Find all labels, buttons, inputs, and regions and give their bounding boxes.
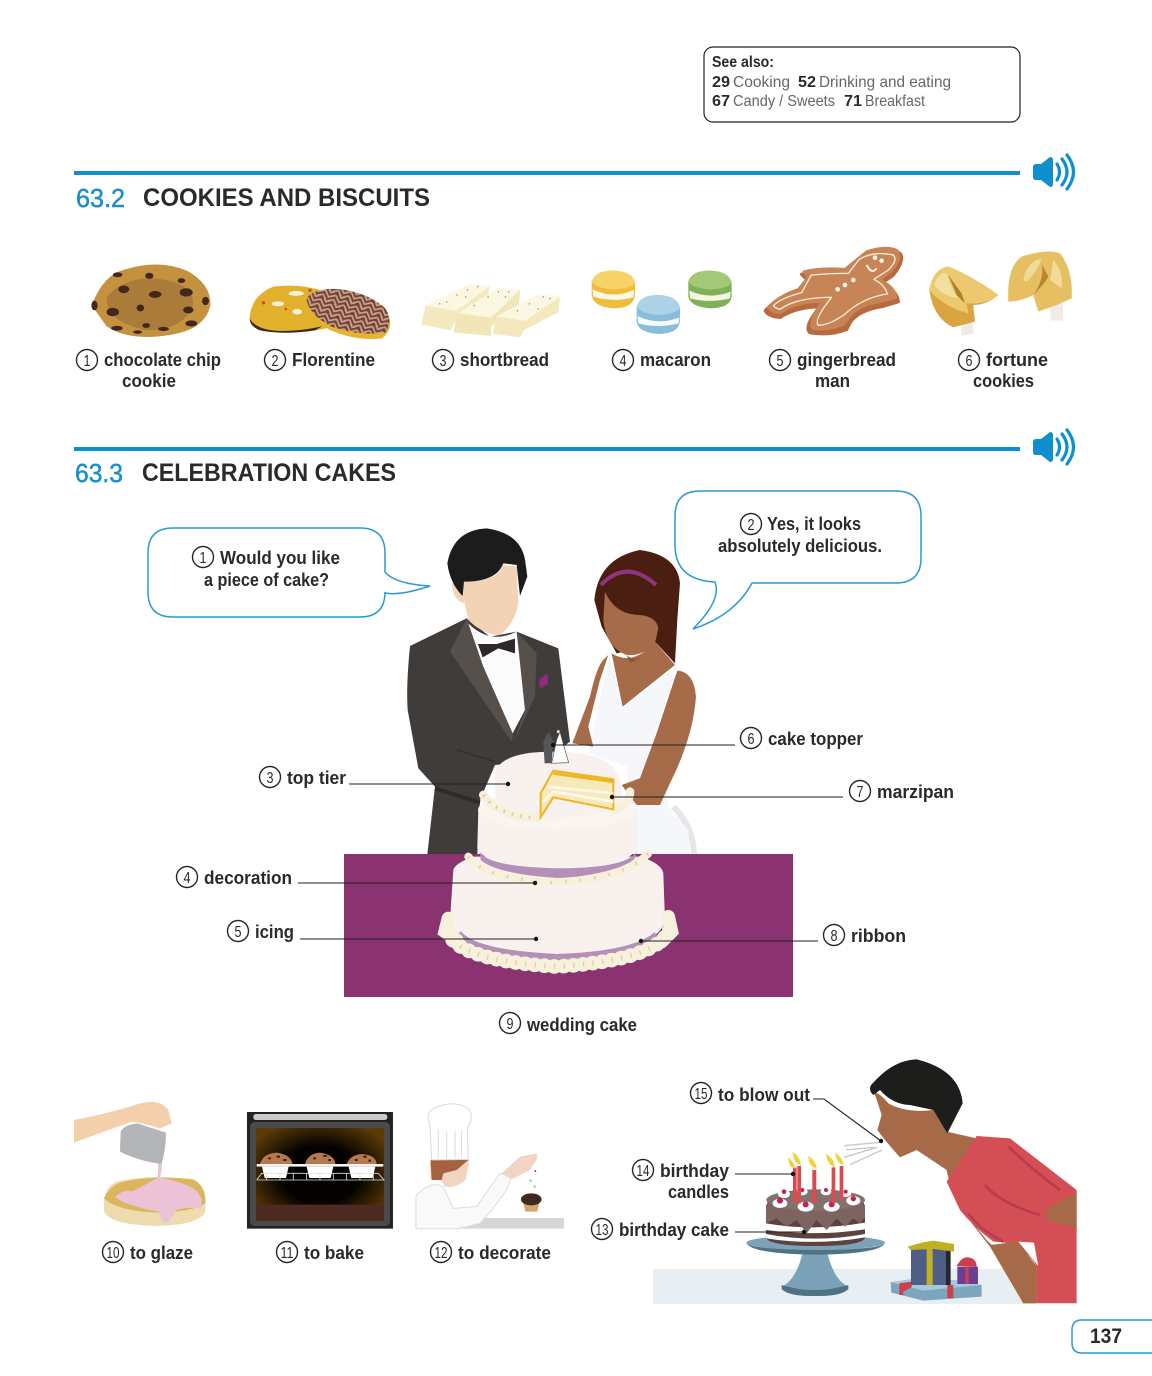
labels: birthday: 14	[636, 1163, 650, 1180]
page number	[1072, 1320, 1152, 1353]
labels: cookies and biscuits: 4	[620, 353, 627, 370]
see also box	[704, 47, 1020, 122]
cake topper	[543, 730, 569, 763]
see also box: 29	[712, 74, 730, 91]
see also box: 71	[844, 93, 862, 110]
illustration: woman blowing out candles	[870, 1059, 1077, 1303]
labels: wedding cake: 5	[234, 924, 242, 941]
labels: cookies and biscuits: macaron	[640, 350, 711, 370]
labels: wedding cake: 8	[830, 928, 838, 945]
section heading 63.3	[74, 447, 1020, 488]
labels: cookies and biscuits: gingerbread	[797, 350, 896, 370]
labels: wedding cake: ribbon	[851, 926, 906, 946]
labels: cookies and biscuits: chocolate chip	[104, 350, 221, 370]
labels: wedding cake	[176, 728, 954, 1035]
labels: verbs: 11	[280, 1245, 294, 1262]
see also box: 67	[712, 93, 730, 110]
illustration: breath lines	[844, 1142, 882, 1165]
labels: cookies and biscuits: man	[815, 371, 850, 391]
labels: cookies and biscuits: shortbread	[460, 350, 549, 370]
illustration: fortune cookies	[929, 251, 1072, 336]
labels: verbs: to bake	[304, 1243, 364, 1263]
speech bubble 1: Would you like	[220, 548, 340, 568]
labels: cookies and biscuits: 1	[84, 353, 91, 370]
illustration: wedding cake	[445, 730, 672, 967]
labels: verbs: to glaze	[130, 1243, 193, 1263]
illustration: Florentine	[250, 286, 390, 339]
labels: cookies and biscuits: 6	[966, 353, 973, 370]
labels: cookies and biscuits: 5	[776, 353, 784, 370]
see also box: Cooking	[733, 74, 790, 91]
speech bubble 1: 1	[200, 550, 207, 567]
illustration: birthday cake on stand	[746, 1152, 885, 1296]
labels: birthday: candles	[668, 1182, 729, 1202]
see also box: See also:	[712, 54, 774, 71]
illustration: groom	[407, 528, 570, 854]
labels: cookies and biscuits: Florentine	[292, 350, 375, 370]
section heading 63.3: 63.3	[75, 458, 123, 488]
page number: 137	[1090, 1325, 1122, 1348]
icon: audio speaker 63.3	[1033, 430, 1074, 464]
illustration: to bake	[247, 1112, 393, 1229]
illustration: to glaze	[74, 1102, 205, 1226]
section heading 63.3: CELEBRATION CAKES	[142, 459, 396, 487]
illustration: bride	[572, 550, 696, 854]
speech bubble 1: a piece of cake?	[204, 570, 329, 590]
labels: wedding cake: 7	[856, 784, 864, 801]
labels: wedding cake: marzipan	[877, 782, 954, 802]
labels: birthday: birthday cake	[619, 1220, 729, 1240]
labels: wedding cake: decoration	[204, 868, 292, 888]
labels: birthday: 13	[596, 1222, 609, 1239]
labels: birthday	[592, 1082, 883, 1240]
labels: cookies and biscuits: 2	[272, 353, 279, 370]
labels: wedding cake: icing	[255, 922, 294, 942]
labels: cookies and biscuits: 3	[440, 353, 447, 370]
see also box: Breakfast	[865, 93, 925, 110]
labels: cookies and biscuits: cookie	[122, 371, 176, 391]
section heading 63.2: COOKIES AND BISCUITS	[143, 184, 430, 212]
labels: wedding cake: top tier	[287, 768, 346, 788]
illustration: table cloth	[344, 854, 793, 997]
section heading 63.2: 63.2	[76, 183, 125, 213]
illustration: chocolate chip cookie	[91, 265, 210, 337]
illustration: to decorate	[416, 1104, 564, 1229]
illustration: shortbread	[421, 284, 560, 337]
see also box: Candy / Sweets	[733, 93, 835, 110]
labels: verbs: 10	[106, 1245, 120, 1262]
slice cut-out	[541, 771, 613, 817]
labels: cookies and biscuits: cookies	[973, 371, 1034, 391]
section heading 63.2	[74, 171, 1020, 213]
labels: cookies and biscuits: fortune	[986, 350, 1048, 370]
see also box: Drinking and eating	[819, 74, 951, 91]
labels: birthday: to blow out	[718, 1085, 810, 1105]
speech bubble 1	[148, 528, 430, 617]
see also box: 52	[798, 74, 816, 91]
labels: wedding cake: 3	[266, 770, 274, 787]
speech bubble 2	[675, 491, 921, 629]
speech bubble 2: absolutely delicious.	[718, 536, 882, 556]
labels: cookies and biscuits	[76, 350, 1048, 391]
icon: audio speaker 63.2	[1033, 155, 1074, 189]
labels: wedding cake: 9	[506, 1016, 514, 1033]
illustration: gingerbread man	[765, 248, 901, 334]
illustration: table	[653, 1269, 1025, 1304]
labels: wedding cake: 4	[184, 870, 191, 887]
illustration: gifts	[891, 1241, 982, 1301]
labels: birthday: birthday	[660, 1161, 729, 1181]
labels: wedding cake: 6	[748, 731, 755, 748]
illustration: macarons	[592, 271, 732, 334]
labels: verbs: 12	[434, 1245, 448, 1262]
labels: verbs: to decorate	[458, 1243, 551, 1263]
speech bubble 2: 2	[748, 517, 755, 534]
labels: verbs	[102, 1242, 551, 1263]
speech bubble 2: Yes, it looks	[767, 514, 861, 534]
labels: wedding cake: wedding cake	[526, 1015, 637, 1035]
labels: wedding cake: cake topper	[768, 729, 863, 749]
labels: birthday: 15	[694, 1086, 708, 1103]
